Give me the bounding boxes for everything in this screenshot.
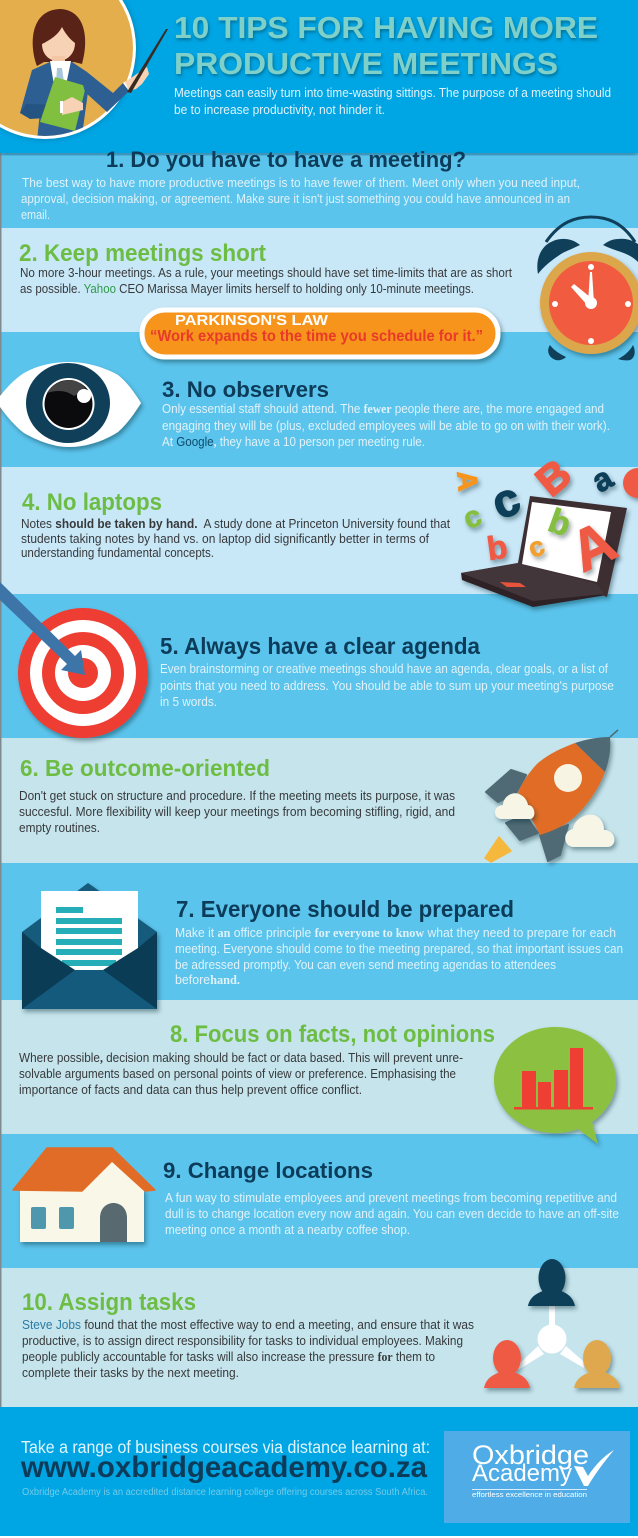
body: tip 10: Steve Jobs found that the most effective way to end a meeting, and ensure that it was — [22, 1317, 474, 1332]
heading: tip 10: 10. Assign tasks — [22, 1289, 196, 1316]
logo: Oxbridge Academy: effortless excellence in education — [472, 1492, 587, 1499]
body: tip 10: complete their tasks by the next meeting. — [22, 1365, 239, 1380]
body: tip 8: importance of facts and data can thus help prevent office conflict. — [19, 1082, 362, 1097]
body: tip 4: students taking notes by hand vs. on laptop did significantly better in terms of — [21, 531, 429, 546]
panel: tip 1 band — [0, 153, 638, 228]
heading: tip 3: 3. No observers — [162, 377, 329, 402]
panel: tip 8 content — [19, 1021, 616, 1144]
body: tip 6: empty routines. — [19, 820, 100, 835]
panel: tip 7 content — [22, 883, 623, 1009]
body: tip 2 — [20, 265, 512, 296]
icon: laptop with letters — [451, 450, 638, 607]
footer note: Oxbridge Academy is an accredited distance learning college offering courses across South Africa. — [22, 1487, 428, 1498]
body: tip 8 — [19, 1050, 463, 1097]
body: tip 4: understanding fundamental concepts. — [21, 545, 214, 560]
subtitle — [174, 85, 611, 117]
panel: footer content — [20, 1431, 630, 1523]
icon: laptop with letters: c — [485, 471, 527, 529]
title: PRODUCTIVE MEETINGS — [174, 46, 558, 81]
body: tip 1: approval, decision making, or agreement. Make sure it isn't just something you could have announced in an — [21, 191, 570, 206]
panel: header — [0, 0, 638, 155]
icon: laptop with letters: B — [527, 450, 580, 505]
icon: laptop with letters: c — [459, 499, 486, 536]
body: tip 3: Only essential staff should attend. The fewer people there are, the more engaged and — [162, 401, 604, 416]
body: tip 2: No more 3-hour meetings. As a rule, your meetings should have set time-limits that are as short — [20, 265, 512, 280]
logo: Oxbridge Academy — [444, 1431, 630, 1523]
subtitle: be to increase productivity, not hinder it. — [174, 102, 385, 117]
panel: tip 6 band — [0, 738, 638, 863]
title — [174, 10, 598, 81]
logo: Oxbridge Academy: Academy — [472, 1460, 572, 1487]
heading: tip 6: 6. Be outcome-oriented — [20, 755, 270, 781]
icon: laptop with letters: A — [451, 470, 484, 492]
icon: laptop with letters: b — [543, 502, 576, 544]
heading: tip 9: 9. Change locations — [163, 1158, 373, 1183]
body: tip 10: productive, is to assign direct responsibility for tasks to individual employees. Making — [22, 1333, 463, 1348]
pointer stick — [127, 29, 168, 93]
icon: laptop with letters: c — [524, 530, 549, 564]
heading: tip 8: 8. Focus on facts, not opinions — [170, 1021, 495, 1048]
footer website URL: www.oxbridgeacademy.co.za — [20, 1451, 427, 1484]
body: tip 1 — [21, 175, 580, 222]
heading: tip 2: 2. Keep meetings short — [19, 240, 266, 267]
panel: tip 5 band — [0, 594, 638, 738]
panel: tip 9 content — [13, 1148, 619, 1242]
body: tip 9 — [165, 1190, 619, 1237]
icon: eye — [0, 362, 141, 447]
panel: tip 1 content — [21, 147, 580, 222]
body: tip 2: as possible. Yahoo CEO Marissa Mayer limits herself to holding only 10-minute meetings. — [20, 281, 474, 296]
body: tip 5: in 5 words. — [160, 694, 217, 709]
callout: Parkinson's law — [142, 310, 498, 357]
body: tip 3 — [162, 401, 610, 449]
callout: Parkinson's law: “Work expands to the time you schedule for it.” — [150, 328, 483, 345]
panel: tip 7 band — [0, 863, 638, 1000]
body: tip 5 — [160, 661, 614, 709]
heading: tip 1: 1. Do you have to have a meeting? — [106, 147, 466, 172]
body: tip 8: solvable arguments based on personal points of view or preference. Emphasising the — [19, 1066, 456, 1081]
panel: tip 4 band — [0, 467, 638, 594]
body: tip 7: be adressed promptly. You can even send meeting agendas to attendees — [175, 957, 556, 972]
panel: tip 10 content — [22, 1259, 620, 1388]
body: tip 7 — [175, 925, 623, 987]
icon: rocket with clouds — [485, 730, 618, 862]
body: tip 3: At Google, they have a 10 person per meeting rule. — [162, 434, 425, 449]
body: tip 10 — [22, 1317, 474, 1380]
panel: tip 2 content — [19, 217, 638, 360]
icon: target with arrow — [0, 582, 148, 738]
body: tip 4 — [21, 516, 450, 560]
panel: tip 4 content — [21, 450, 638, 607]
header band — [0, 0, 638, 153]
body: tip 10: people publicly accountable for tasks will also increase the pressure for them to — [22, 1349, 435, 1364]
heading: tip 5: 5. Always have a clear agenda — [160, 633, 480, 659]
presenter raised arm — [78, 67, 129, 112]
panel: tip 8 band — [0, 1000, 638, 1134]
callout: Parkinson's law: PARKINSON'S LAW — [175, 312, 329, 329]
footer call to action: Take a range of business courses via distance learning at: — [21, 1437, 430, 1457]
body: tip 7: beforehand. — [175, 972, 240, 987]
panel: tip 10 band — [0, 1268, 638, 1407]
icon: speech bubble bar chart — [494, 1027, 616, 1144]
body: tip 4: Notes should be taken by hand. A study done at Princeton University found that — [21, 516, 450, 531]
icon: envelope with letter — [22, 883, 157, 1009]
logo: Oxbridge Academy: Oxbridge — [472, 1440, 589, 1470]
body: tip 6 — [19, 788, 455, 835]
icon: people network — [484, 1259, 620, 1388]
panel: tip 9 band — [0, 1134, 638, 1268]
body: tip 7: Make it an office principle for everyone to know what they need to prepare for each — [175, 925, 616, 940]
body: tip 9: meeting once a month at a nearby coffee shop. — [165, 1222, 410, 1237]
panel: tip 6 content — [19, 730, 618, 862]
icon: presenter woman with pointer — [0, 0, 168, 150]
title: 10 TIPS FOR HAVING MORE — [174, 10, 598, 45]
body: tip 6: Don't get stuck on structure and procedure. If the meeting meets its purpose, it was — [19, 788, 455, 803]
panel: tip 3 content — [0, 362, 610, 449]
icon: laptop with letters: b — [485, 528, 510, 567]
body: tip 1: email. — [21, 207, 50, 222]
heading: tip 7: 7. Everyone should be prepared — [176, 896, 514, 922]
icon: house — [13, 1148, 155, 1242]
panel: tip 5 content — [0, 582, 614, 738]
icon: laptop with letters: A — [560, 508, 626, 585]
panel: footer band — [0, 1407, 638, 1536]
panel: tip 3 band — [0, 332, 638, 467]
icon: alarm clock — [537, 217, 638, 360]
heading: tip 4: 4. No laptops — [22, 489, 162, 516]
icon: laptop with letters: a — [585, 459, 619, 499]
panel: tip 2 band — [0, 228, 638, 332]
body: tip 1: The best way to have more productive meetings is to have fewer of them. Meet only when you need input, — [22, 175, 580, 190]
body: tip 6: succesful. More flexibility will keep your meetings from becoming stifling, rigid, and — [19, 804, 455, 819]
body: tip 8: Where possible, decision making should be fact or data based. This will prevent unre- — [19, 1050, 463, 1065]
